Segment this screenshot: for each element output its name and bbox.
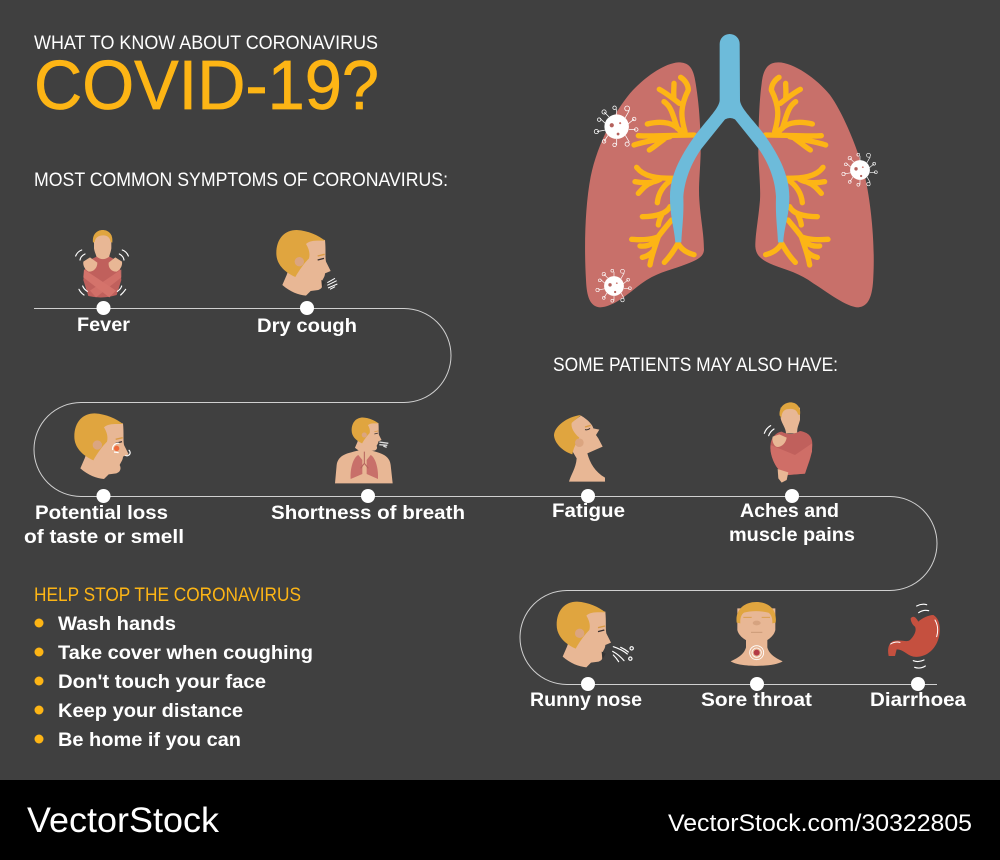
- label: runny nose: Runny nose: [530, 690, 642, 711]
- trachea: [670, 34, 789, 242]
- label: shortness of breath: Shortness of breath: [271, 503, 465, 524]
- symptom timeline path: [34, 308, 937, 684]
- tip: keep distance: Keep your distance: [58, 701, 243, 722]
- icon: fatigue: [554, 415, 605, 482]
- label: dry cough: Dry cough: [257, 316, 357, 337]
- right lung: [755, 62, 874, 307]
- tip: don't touch face: Don't touch your face: [58, 672, 266, 693]
- icon: fever: [76, 230, 128, 297]
- list: prevention tips: [34, 614, 313, 751]
- footer bar: [0, 780, 1000, 860]
- heading: common symptoms: MOST COMMON SYMPTOMS OF CORONAVIRUS:: [34, 170, 448, 191]
- label: aches and muscle pains: [729, 501, 855, 546]
- footer logo: VectorStock: [27, 801, 220, 840]
- virus bottom left: [596, 269, 631, 302]
- bronchi right: [765, 77, 828, 265]
- label: potential loss of taste or smell: [24, 503, 184, 548]
- label: aches and muscle pains: Aches and: [740, 501, 839, 522]
- label: diarrhoea: Diarrhoea: [870, 690, 966, 711]
- subtitle: WHAT TO KNOW ABOUT CORONAVIRUS: [34, 33, 378, 54]
- icon: aches and muscle pains: [764, 402, 812, 483]
- virus top left: [594, 106, 638, 147]
- tip: be home: Be home if you can: [58, 730, 241, 751]
- illustration: lungs with viruses: [585, 34, 877, 307]
- label: sore throat: Sore throat: [701, 690, 813, 711]
- heading: other symptoms: SOME PATIENTS MAY ALSO HAVE:: [553, 355, 838, 376]
- heading: help stop: HELP STOP THE CORONAVIRUS: [34, 585, 301, 606]
- label: fever: Fever: [77, 315, 131, 336]
- icon: stomach: [888, 604, 940, 668]
- tip: take cover: Take cover when coughing: [58, 643, 313, 664]
- left lung: [585, 62, 704, 307]
- timeline dots: [96, 301, 925, 691]
- label: potential loss of taste or smell: of taste or smell: [24, 527, 184, 548]
- icon: loss of taste or smell: [74, 413, 130, 479]
- label: aches and muscle pains: muscle pains: [729, 525, 855, 546]
- icon: shortness of breath: [335, 417, 393, 483]
- title: COVID-19?: [34, 46, 379, 124]
- icon: sore throat: [731, 602, 783, 666]
- icon: runny nose: [557, 602, 633, 667]
- footer url: VectorStock.com/30322805: [668, 810, 972, 837]
- virus right: [842, 153, 877, 186]
- bronchi left: [632, 77, 694, 265]
- label: fatigue: Fatigue: [552, 501, 625, 522]
- tip: wash hands: Wash hands: [58, 614, 176, 635]
- label: potential loss of taste or smell: Potential loss: [35, 503, 168, 524]
- icon: dry cough: [276, 230, 337, 296]
